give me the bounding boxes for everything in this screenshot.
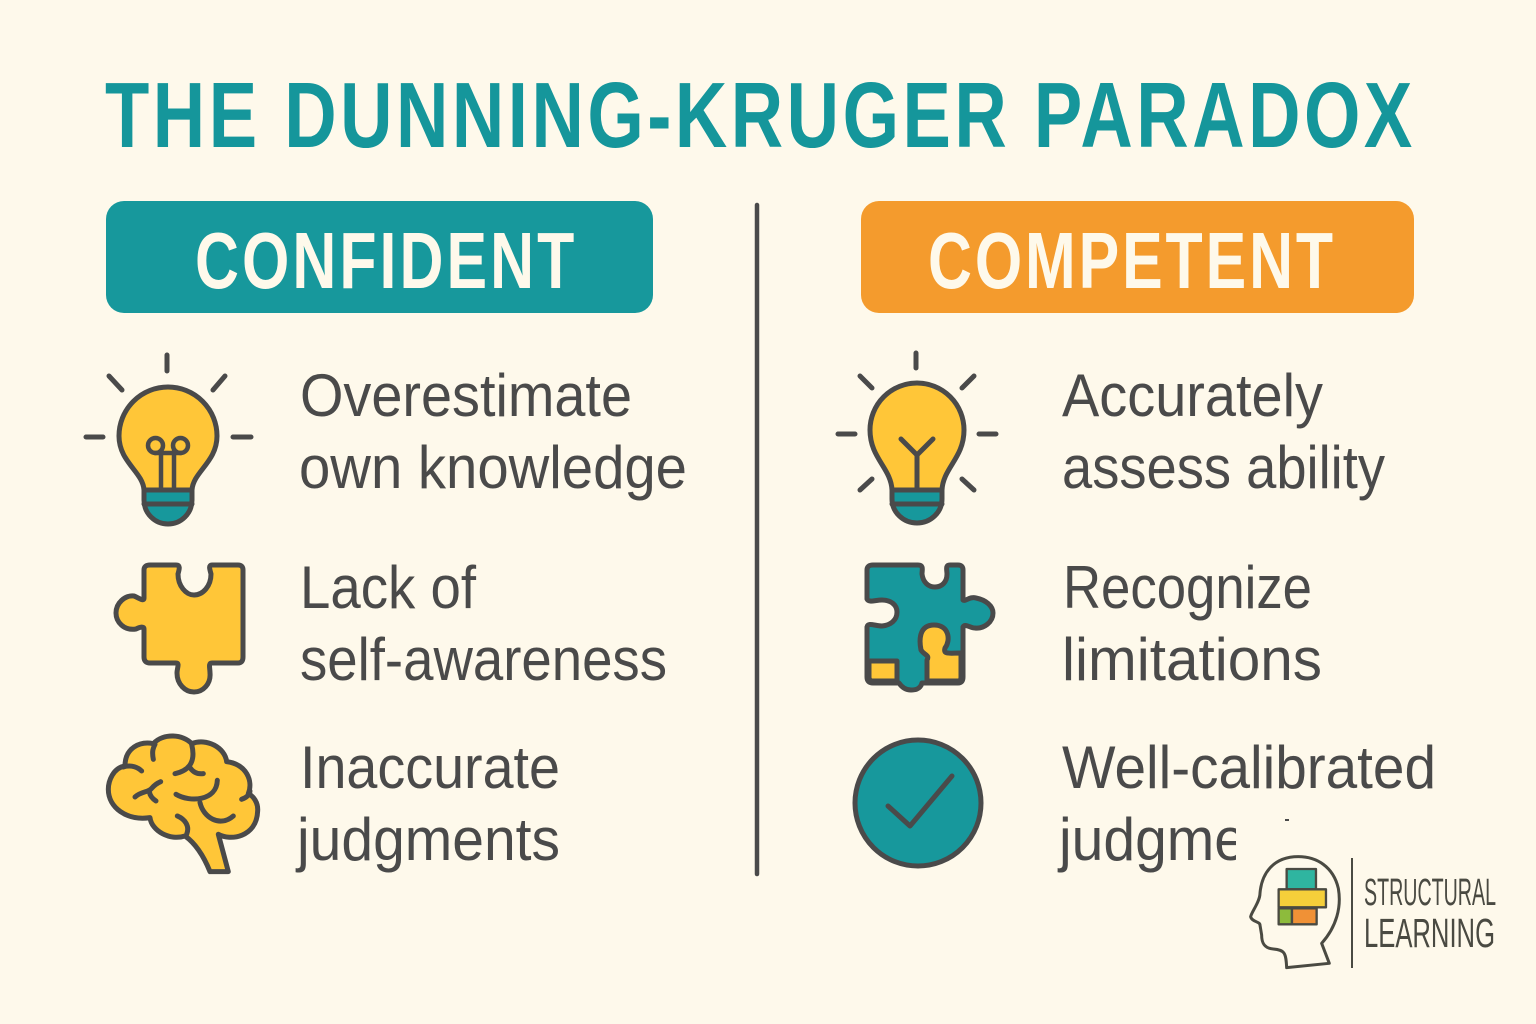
text: inaccurate judgments: Inaccurate xyxy=(300,734,560,801)
text: accurately assess ability xyxy=(1062,362,1385,501)
icon: light bulb with looped filament xyxy=(86,355,251,524)
heading: confident: CONFIDENT xyxy=(195,217,574,306)
text: accurately assess ability: assess ability xyxy=(1062,434,1385,501)
panel: confident xyxy=(86,201,687,873)
icon: head with blocks xyxy=(1251,857,1339,968)
icon: light bulb with Y filament xyxy=(838,353,996,523)
text: well-calibrated judgments: judgments xyxy=(1057,806,1322,873)
text: overestimate own knowledge: Overestimate xyxy=(300,362,632,429)
icon: teal and yellow puzzle piece xyxy=(867,565,993,690)
heading: competent xyxy=(861,201,1414,313)
icon: yellow puzzle piece xyxy=(116,565,243,692)
text: well-calibrated judgments: Well-calibrated xyxy=(1062,734,1436,801)
heading: competent: COMPETENT xyxy=(928,217,1333,306)
text: inaccurate judgments xyxy=(295,734,560,873)
text: overestimate own knowledge xyxy=(299,362,687,501)
logo divider xyxy=(1351,858,1353,968)
heading: confident xyxy=(106,201,653,313)
icon: brain xyxy=(108,736,258,872)
logo: structural learning xyxy=(1251,857,1496,968)
center divider xyxy=(755,205,759,874)
text: lack of self-awareness: self-awareness xyxy=(300,626,667,693)
text: recognize limitations: Recognize xyxy=(1063,554,1312,621)
title: THE DUNNING-KRUGER PARADOX xyxy=(105,63,1412,167)
text: recognize limitations xyxy=(1062,554,1322,693)
icon: check mark circle xyxy=(855,740,981,866)
logo patch xyxy=(1236,815,1516,982)
text: lack of self-awareness xyxy=(300,554,667,693)
text: lack of self-awareness: Lack of xyxy=(300,554,476,621)
text: well-calibrated judgments xyxy=(1057,734,1436,873)
text: recognize limitations: limitations xyxy=(1062,626,1322,693)
panel: competent xyxy=(838,201,1436,873)
text: accurately assess ability: Accurately xyxy=(1062,362,1323,429)
text: overestimate own knowledge: own knowledge xyxy=(299,434,687,501)
text: inaccurate judgments: judgments xyxy=(295,806,560,873)
logo wordmark xyxy=(1364,872,1496,956)
